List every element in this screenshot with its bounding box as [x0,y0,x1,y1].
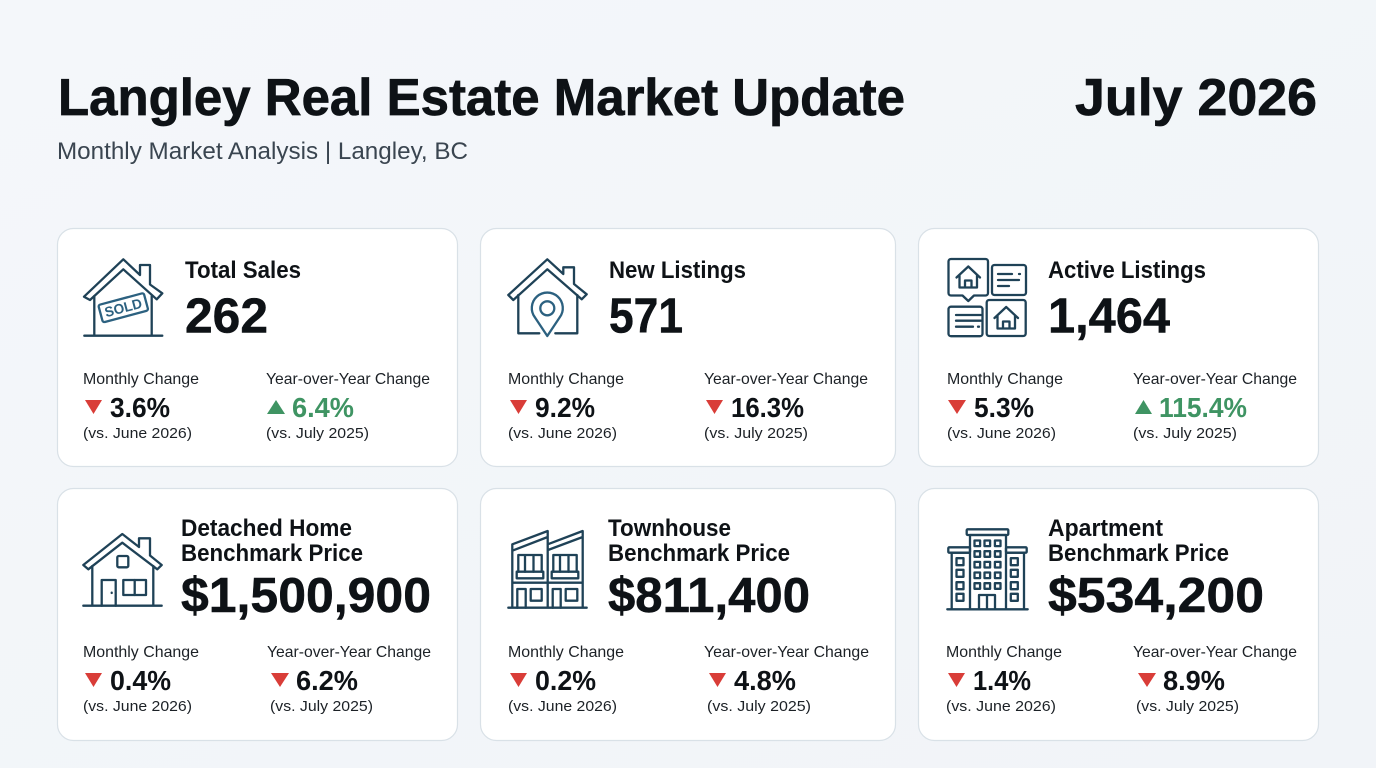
monthly change: Monthly Change [947,371,1063,388]
year-over-year change: 8.9% [1163,665,1225,696]
year-over-year change [266,371,430,442]
monthly change: Monthly Change [946,644,1062,661]
icon: sold house [84,259,162,336]
subtitle: Monthly Market Analysis | Langley, BC [57,138,468,165]
heading [608,515,790,567]
monthly change [508,644,624,715]
icon: listing cards [948,259,1026,336]
monthly change: Monthly Change [508,644,624,661]
value: 262 [185,290,268,344]
year-over-year change: Year-over-Year Change [1133,371,1297,388]
icon: sold house: SOLD [103,295,144,320]
icon: house with location pin [508,259,587,336]
heading: Townhouse [608,515,731,542]
heading: New Listings [609,257,746,284]
monthly change: Monthly Change [83,371,199,388]
year-over-year change: (vs. July 2025) [1136,698,1239,715]
year-over-year change: 6.2% [296,665,358,696]
heading: Benchmark Price [1048,540,1229,567]
icon: detached house [83,534,162,606]
title: Langley Real Estate Market Update [58,69,905,127]
monthly change: (vs. June 2026) [947,425,1056,442]
icon: townhouses [508,531,587,608]
heading: Benchmark Price [608,540,790,567]
year-over-year change: (vs. July 2025) [1133,425,1237,442]
value: 571 [609,290,683,344]
year-over-year change: (vs. July 2025) [270,698,373,715]
monthly change: 5.3% [974,392,1034,423]
monthly change: (vs. June 2026) [946,698,1056,715]
heading: Benchmark Price [181,540,363,567]
monthly change [508,371,624,442]
year-over-year change [1133,371,1297,442]
panel: apartment benchmark price [918,488,1318,740]
year-over-year change: (vs. July 2025) [266,425,369,442]
panel: active listings [918,228,1318,466]
value: $1,500,900 [181,569,431,623]
year-over-year change [267,644,431,715]
heading [1048,515,1229,567]
monthly change [83,644,199,715]
year-over-year change: (vs. July 2025) [707,698,811,715]
monthly change: 9.2% [535,392,595,423]
monthly change: Monthly Change [83,644,199,661]
monthly change: (vs. June 2026) [83,425,192,442]
monthly change: 0.4% [110,665,171,696]
year-over-year change: 16.3% [731,392,804,423]
heading [181,515,363,567]
monthly change [83,371,199,442]
monthly change: Monthly Change [508,371,624,388]
monthly change [947,371,1063,442]
monthly change: 3.6% [110,392,170,423]
heading: Detached Home [181,515,352,542]
monthly change: 1.4% [973,665,1031,696]
year-over-year change: 115.4% [1159,392,1247,423]
date heading: July 2026 [1075,69,1317,127]
monthly change [946,644,1062,715]
year-over-year change: Year-over-Year Change [704,371,868,388]
panel: new listings [480,228,896,466]
heading: Total Sales [185,257,301,284]
year-over-year change: 4.8% [734,665,796,696]
icon: apartment building [947,529,1028,609]
value: $534,200 [1048,569,1264,623]
year-over-year change: Year-over-Year Change [266,371,430,388]
year-over-year change [1133,644,1297,715]
panel: townhouse benchmark price [480,488,896,740]
year-over-year change: (vs. July 2025) [704,425,808,442]
year-over-year change: Year-over-Year Change [1133,644,1297,661]
heading: Active Listings [1048,257,1206,284]
heading: Apartment [1048,515,1163,542]
monthly change: (vs. June 2026) [508,425,617,442]
value: 1,464 [1048,290,1170,344]
monthly change: (vs. June 2026) [508,698,617,715]
panel: total sales [58,228,458,466]
monthly change: (vs. June 2026) [83,698,192,715]
value: $811,400 [608,569,810,623]
year-over-year change: Year-over-Year Change [704,644,869,661]
year-over-year change [704,371,868,442]
year-over-year change: 6.4% [292,392,354,423]
panel: detached home benchmark price [58,488,458,740]
year-over-year change: Year-over-Year Change [267,644,431,661]
year-over-year change [704,644,869,715]
monthly change: 0.2% [535,665,596,696]
